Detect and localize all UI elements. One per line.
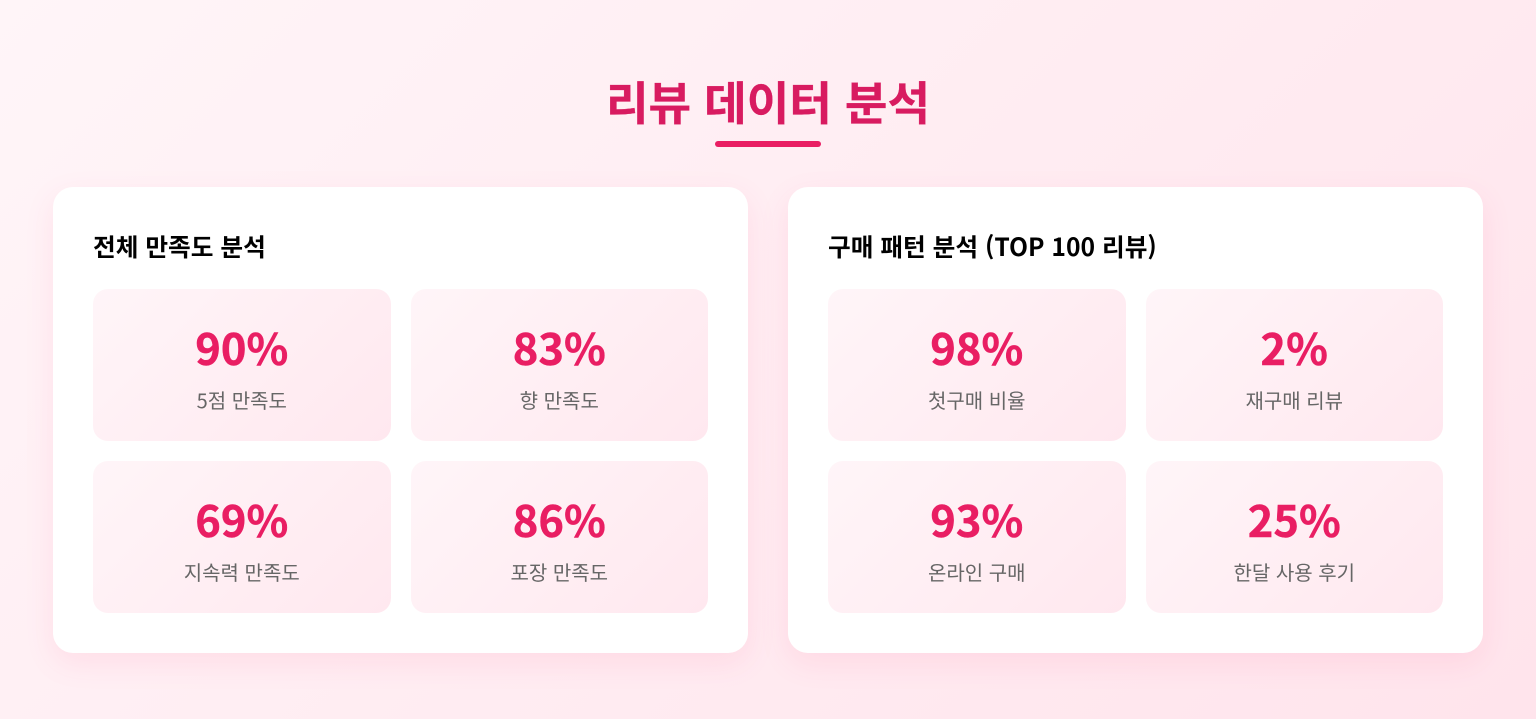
panel: purchase patterns [788, 187, 1483, 653]
stat card: one-month review: 한달 사용 후기 [1233, 557, 1355, 586]
title underline [715, 141, 821, 147]
stat card: 5-star satisfaction [93, 289, 390, 441]
stat card: first purchase [828, 289, 1126, 441]
stat card: longevity satisfaction: 지속력 만족도 [184, 557, 300, 586]
stat card: first purchase: 첫구매 비율 [928, 385, 1026, 414]
stat card: online purchase: 93% [930, 488, 1023, 550]
title: 리뷰 데이터 분석 [606, 67, 930, 134]
stat card: packaging satisfaction: 86% [513, 488, 606, 550]
stat card: first purchase: 98% [930, 316, 1023, 378]
panel heading: 구매 패턴 분석 (TOP 100 리뷰) [828, 228, 1157, 264]
stat card: one-month review: 25% [1248, 488, 1341, 550]
stat card: 5-star satisfaction: 90% [195, 316, 288, 378]
stat card: online purchase: 온라인 구매 [928, 557, 1026, 586]
stat card: scent satisfaction: 83% [513, 316, 606, 378]
stat card: scent satisfaction: 향 만족도 [520, 385, 599, 414]
stat card: repurchase: 2% [1261, 316, 1328, 378]
panel: overall satisfaction [53, 187, 748, 653]
stat card: packaging satisfaction [410, 461, 708, 613]
stat card: packaging satisfaction: 포장 만족도 [510, 557, 608, 586]
stat card: online purchase [828, 461, 1126, 613]
stat card: one-month review [1146, 461, 1443, 613]
panel heading: 전체 만족도 분석 [93, 228, 266, 264]
stat card: repurchase [1146, 289, 1443, 441]
stat card: longevity satisfaction: 69% [195, 488, 288, 550]
stat card: repurchase: 재구매 리뷰 [1245, 385, 1343, 414]
stat card: 5-star satisfaction: 5점 만족도 [197, 385, 287, 414]
stat card: scent satisfaction [410, 289, 708, 441]
stat card: longevity satisfaction [93, 461, 390, 613]
